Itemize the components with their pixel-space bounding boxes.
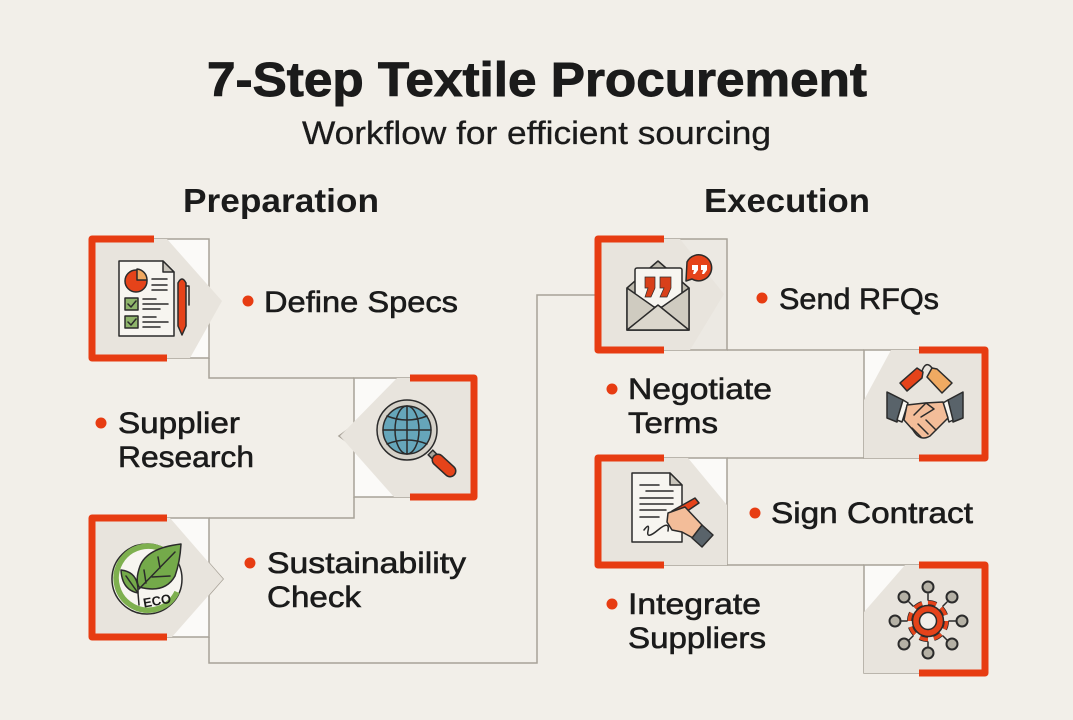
- bullet: [750, 508, 760, 518]
- label: [628, 373, 772, 440]
- red bracket: [92, 239, 167, 358]
- icon: gear network: [890, 582, 968, 658]
- panel backing: [864, 350, 985, 458]
- icon: eco leaf: [112, 544, 182, 614]
- step 5: negotiate terms: [606, 350, 985, 458]
- panel backing: [120, 518, 223, 637]
- arrow panel: [92, 518, 223, 637]
- step 1: define specs: [92, 239, 458, 358]
- bullet: [606, 598, 618, 610]
- icon: globe with magnifier: [377, 400, 450, 471]
- label: [628, 588, 766, 655]
- panel backing: [120, 239, 209, 358]
- label: [118, 407, 254, 474]
- bullet: [242, 296, 254, 306]
- arrow panel: [598, 239, 724, 350]
- red bracket: [598, 458, 664, 565]
- panel backing: [598, 458, 727, 565]
- label: [267, 547, 466, 614]
- red bracket: [919, 350, 985, 458]
- label: Check: [267, 581, 362, 614]
- panel backing: [339, 378, 474, 497]
- label: Send RFQs: [779, 283, 939, 316]
- connector: step 5 to step 6: [727, 457, 864, 459]
- arrow panel: [340, 378, 474, 497]
- label: Research: [118, 441, 254, 474]
- panel backing: [598, 239, 727, 350]
- label: Integrate: [628, 588, 761, 621]
- red bracket: [92, 518, 167, 637]
- connector: step 1 to step 2: [209, 358, 354, 378]
- heading: execution: Execution: [704, 182, 870, 219]
- label: Suppliers: [628, 622, 766, 655]
- step 4: send rfqs: [598, 239, 939, 350]
- connector: step 3 to step 4: [209, 295, 596, 663]
- icon: document with pen: [119, 261, 189, 336]
- bullet: [756, 292, 768, 304]
- icon: contract and hand: [632, 473, 713, 547]
- arrow panel: [864, 565, 985, 673]
- red bracket: [598, 239, 664, 350]
- subtitle: Workflow for efficient sourcing: [302, 115, 771, 151]
- red bracket: [919, 565, 985, 673]
- title: 7-Step Textile Procurement: [207, 54, 867, 107]
- step 2: supplier research: [96, 378, 474, 497]
- label: Sign Contract: [771, 497, 974, 530]
- label: Negotiate: [628, 373, 772, 406]
- step 3: sustainability check: [92, 518, 466, 637]
- arrow panel: [598, 458, 727, 565]
- arrow panel: [864, 350, 985, 458]
- connector: step 6 to step 7: [727, 564, 864, 566]
- connector: step 2 to step 3: [209, 497, 354, 518]
- icon: eco leaf: ECO: [142, 591, 172, 611]
- label: Define Specs: [264, 286, 458, 319]
- bullet: [606, 384, 618, 394]
- label: Terms: [628, 407, 718, 440]
- connector: step 4 to step 5: [727, 349, 864, 351]
- bullet: [244, 558, 256, 568]
- icon: handshake with tags: [887, 365, 963, 438]
- heading: preparation: Preparation: [183, 182, 379, 219]
- red bracket: [410, 378, 474, 497]
- arrow panel: [92, 239, 222, 358]
- step 6: sign contract: [598, 458, 974, 565]
- label: Sustainability: [267, 547, 466, 580]
- icon: envelope with quotes: [627, 255, 712, 330]
- step 7: integrate suppliers: [606, 565, 985, 673]
- label: Supplier: [118, 407, 240, 440]
- bullet: [96, 418, 106, 428]
- panel backing: [864, 565, 985, 673]
